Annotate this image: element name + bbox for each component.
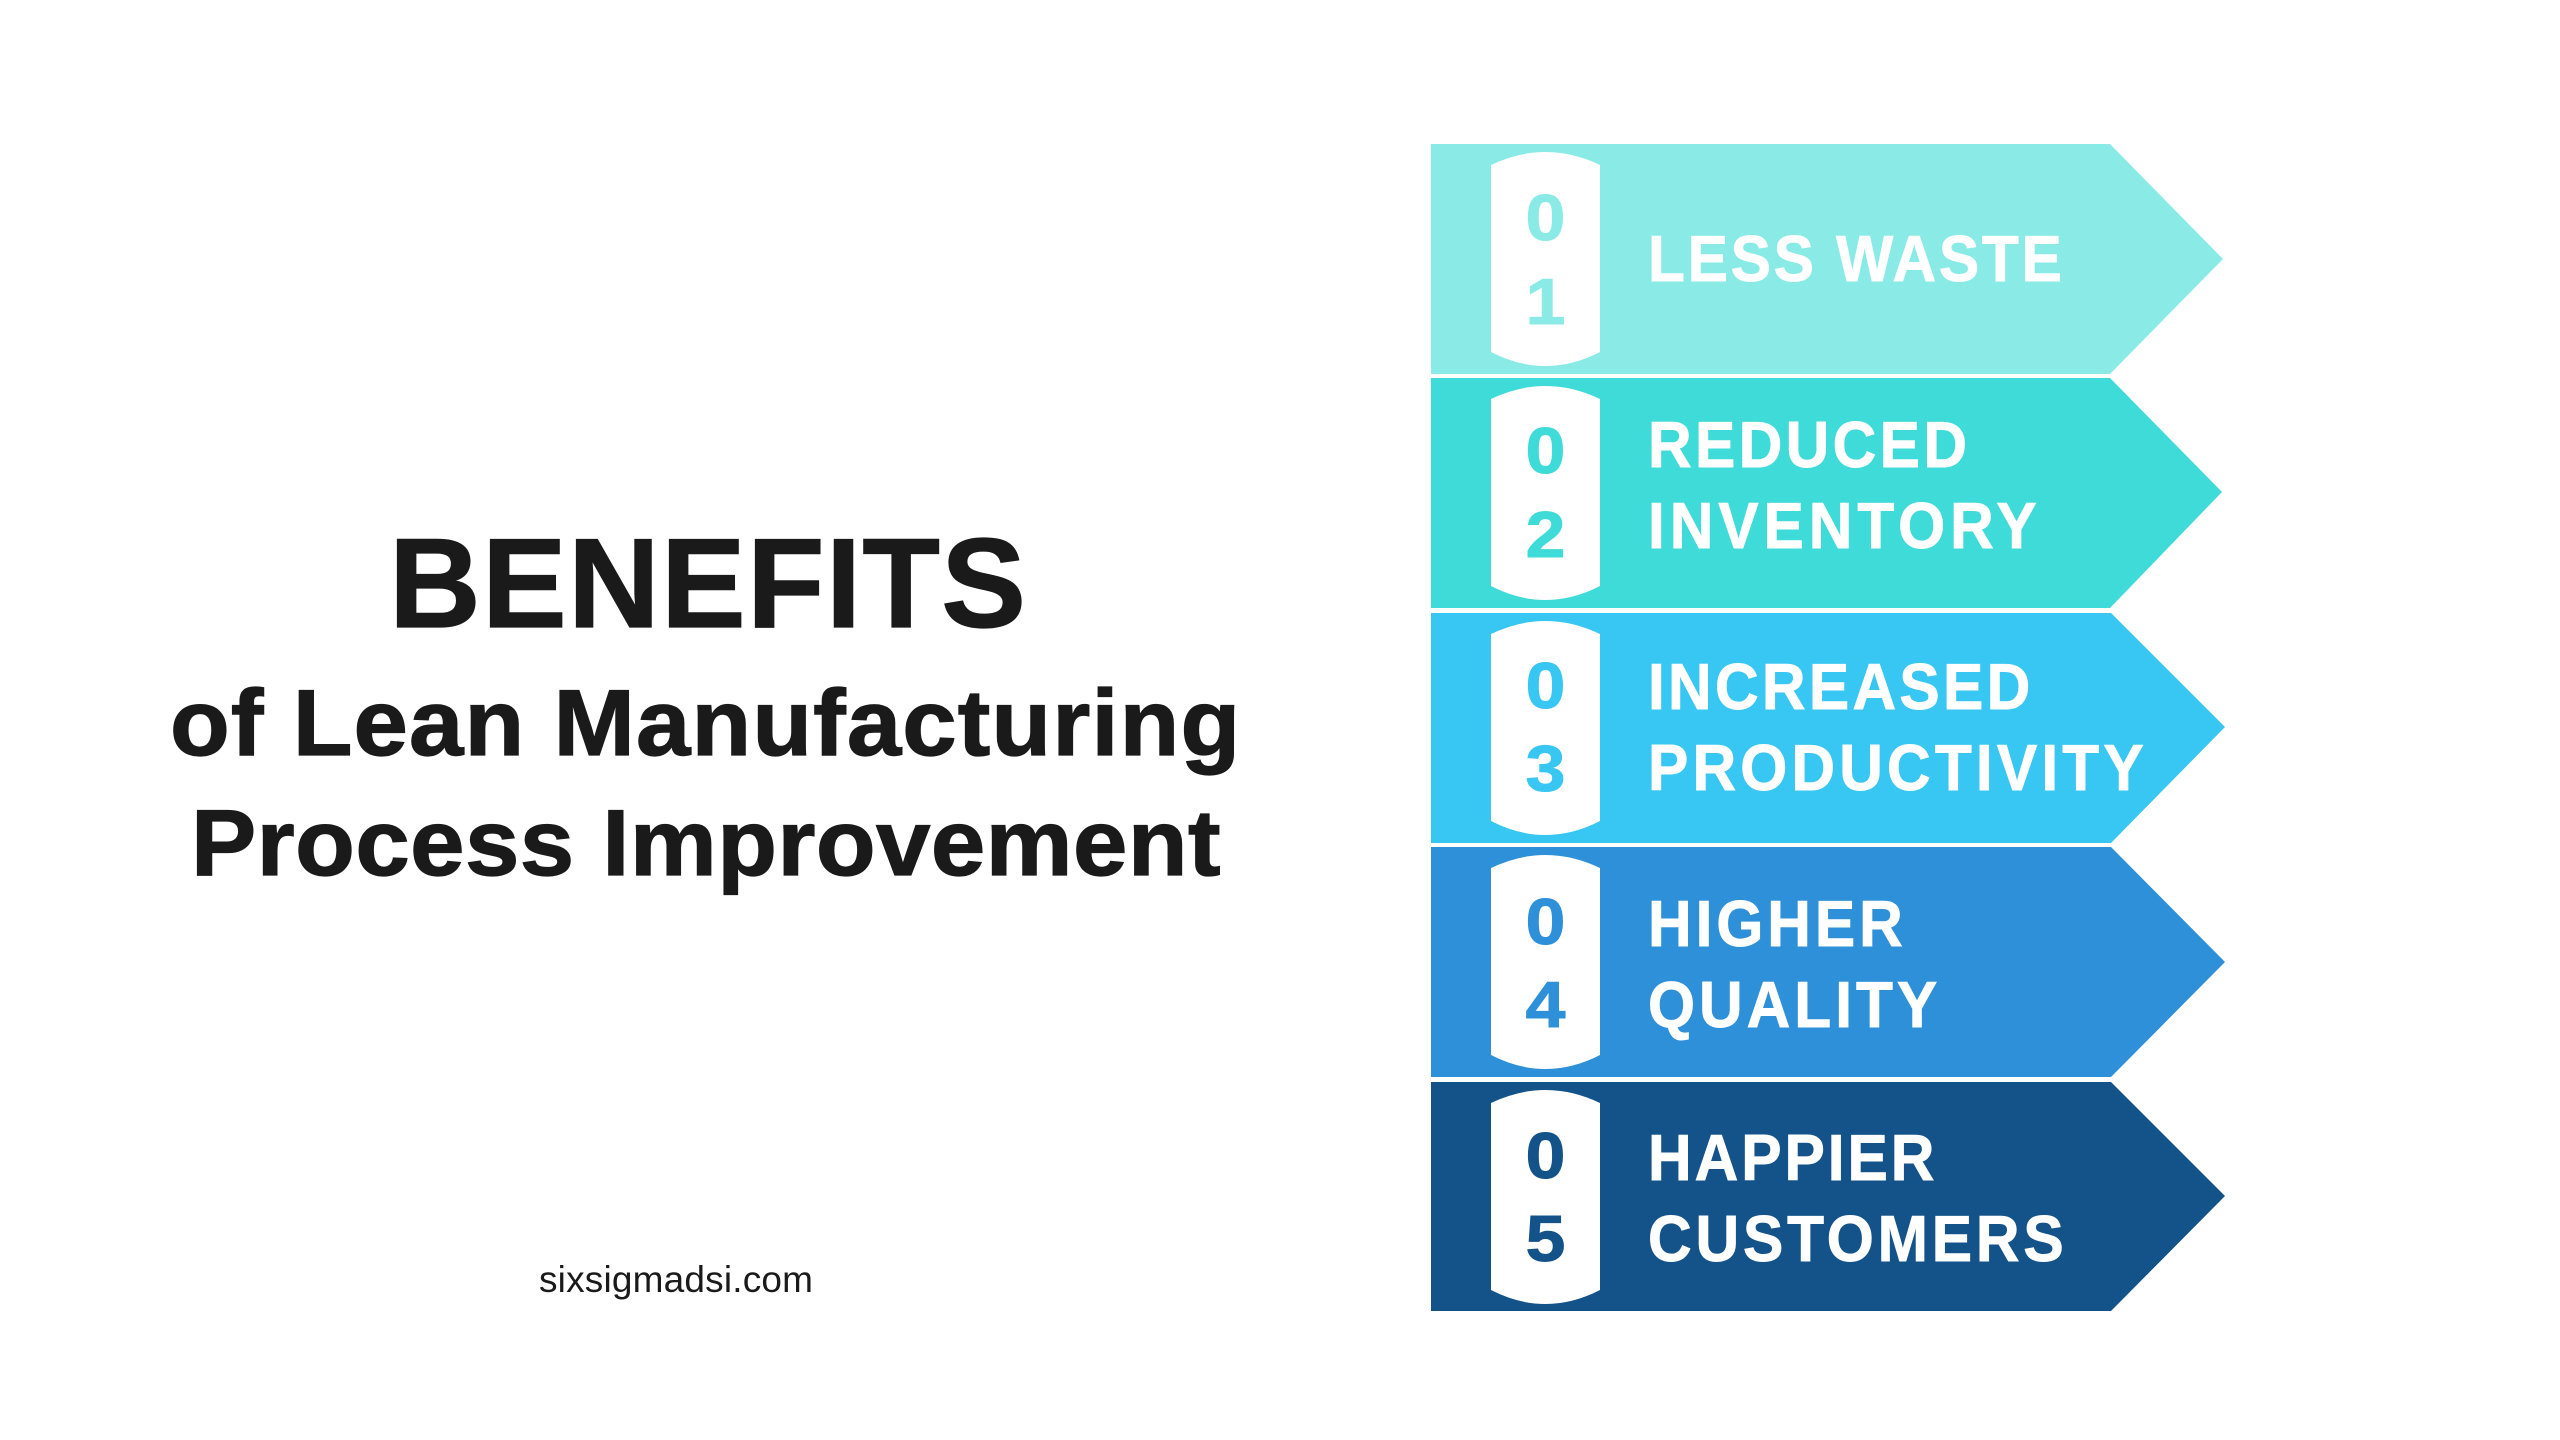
arrow shape 04 bbox=[1431, 847, 2225, 1077]
label 03: INCREASED bbox=[1648, 651, 2030, 723]
subheading line 1: of Lean Manufacturing bbox=[170, 671, 1240, 776]
band 01: less waste bbox=[1431, 144, 2223, 374]
number 04: 4 bbox=[1526, 969, 1565, 1041]
label 02 bbox=[1648, 409, 2037, 562]
arrow shape 05 bbox=[1431, 1082, 2225, 1311]
number 01 bbox=[1526, 182, 1565, 338]
band 03: increased productivity bbox=[1431, 613, 2225, 843]
number capsule 03 bbox=[1491, 621, 1600, 835]
band 05: happier customers bbox=[1431, 1082, 2225, 1311]
label 05: CUSTOMERS bbox=[1648, 1203, 2064, 1275]
number 04: 0 bbox=[1526, 886, 1565, 958]
website footer: sixsigmadsi.com bbox=[539, 1259, 813, 1300]
number 03: 3 bbox=[1526, 733, 1565, 805]
number 05: 0 bbox=[1526, 1120, 1565, 1192]
number 05 bbox=[1526, 1120, 1565, 1275]
subheading line 2: Process Improvement bbox=[191, 791, 1221, 896]
band 02: reduced inventory bbox=[1431, 378, 2222, 608]
number capsule 02 bbox=[1491, 386, 1600, 600]
label 02: INVENTORY bbox=[1648, 490, 2037, 562]
band 04: higher quality bbox=[1431, 847, 2225, 1077]
number 01: 1 bbox=[1526, 266, 1565, 338]
arrow shape 02 bbox=[1431, 378, 2222, 608]
number 02: 2 bbox=[1526, 499, 1565, 571]
label 05: HAPPIER bbox=[1648, 1122, 1934, 1194]
number capsule 04 bbox=[1491, 855, 1600, 1069]
label 01: LESS WASTE bbox=[1648, 223, 2062, 295]
label 03 bbox=[1648, 651, 2144, 804]
arrow shape 03 bbox=[1431, 613, 2225, 843]
number 01: 0 bbox=[1526, 182, 1565, 254]
label 05 bbox=[1648, 1122, 2064, 1275]
number 03 bbox=[1526, 650, 1565, 805]
arrow shape 01 bbox=[1431, 144, 2223, 374]
label 04: HIGHER bbox=[1648, 888, 1903, 960]
number capsule 01 bbox=[1491, 152, 1600, 366]
label 03: PRODUCTIVITY bbox=[1648, 732, 2144, 804]
number 03: 0 bbox=[1526, 650, 1565, 722]
number 04 bbox=[1526, 886, 1565, 1041]
number capsule 05 bbox=[1491, 1090, 1600, 1304]
heading: benefits: BENEFITS bbox=[389, 512, 1026, 654]
number 05: 5 bbox=[1526, 1203, 1565, 1275]
number 02 bbox=[1526, 415, 1565, 571]
number 02: 0 bbox=[1526, 415, 1565, 487]
label 04 bbox=[1648, 888, 1937, 1041]
label 02: REDUCED bbox=[1648, 409, 1967, 481]
title block bbox=[170, 512, 1240, 896]
label 04: QUALITY bbox=[1648, 969, 1937, 1041]
